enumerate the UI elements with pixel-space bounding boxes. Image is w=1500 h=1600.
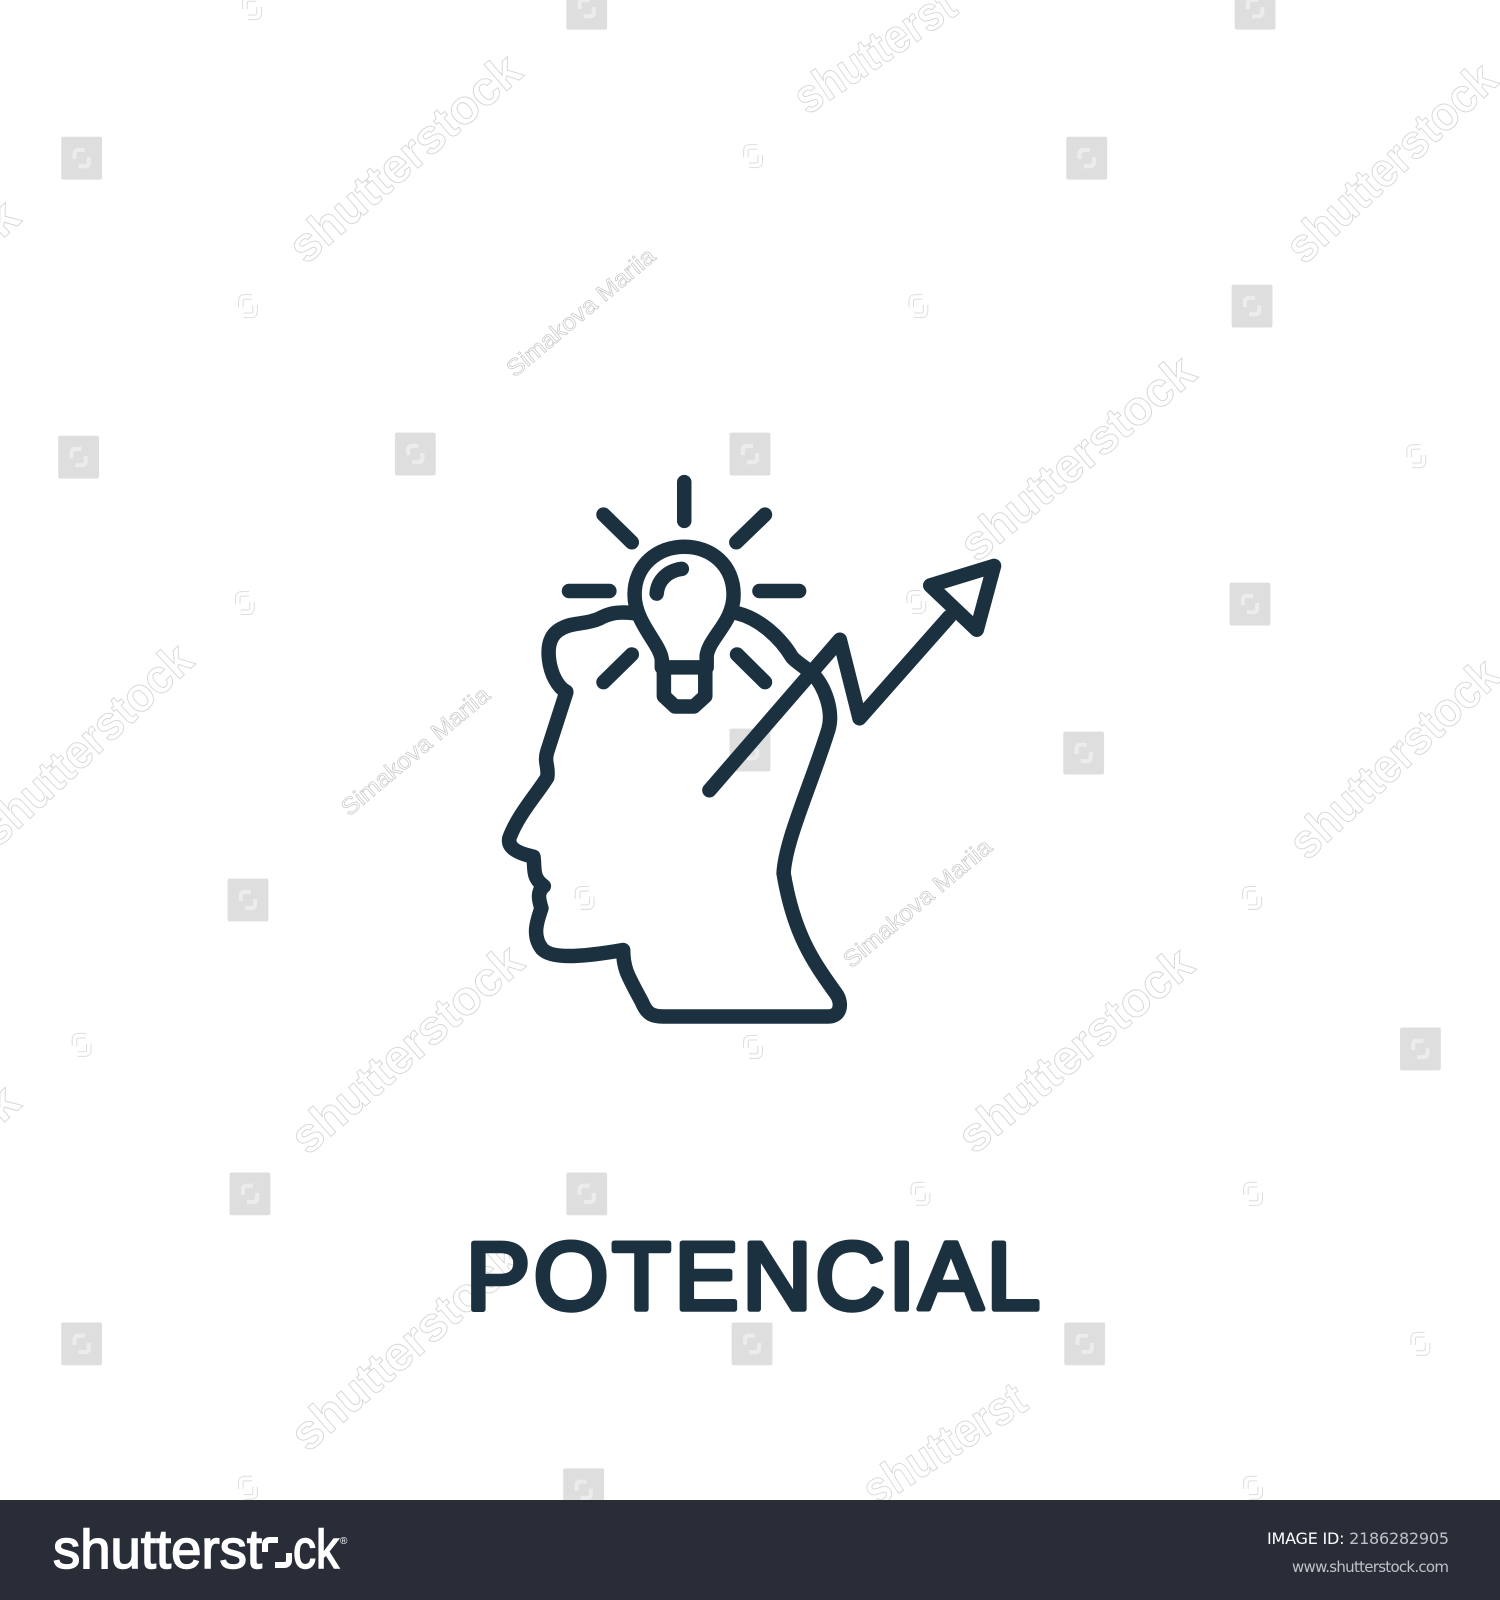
footer: shutterstock logo: ®	[340, 1536, 348, 1547]
title: POTENCIAL	[466, 1223, 1040, 1330]
watermark: shutterstock wordmarks: shutterstock	[280, 934, 534, 1165]
footer: shutterstock logo: ck	[293, 1518, 339, 1580]
watermark: shutterstock wordmarks: shutterstock	[950, 345, 1206, 572]
watermark: shutterstock wordmarks: shutterstock	[278, 43, 532, 274]
footer: shutterstock logo: shutterst	[53, 1518, 262, 1580]
watermark: shutterstock wordmarks: shutterst	[853, 1373, 1036, 1517]
watermark: author credit	[336, 242, 998, 973]
watermark: shutterstock wordmarks: shutterstock	[280, 1231, 534, 1462]
watermark: author credit: Simakova Mariia	[838, 833, 998, 973]
watermark: author credit: Simakova Mariia	[501, 242, 661, 382]
icon: bulb rays	[569, 482, 799, 682]
icon: light bulb	[635, 547, 734, 706]
footer: image id: IMAGE ID: 2186282905	[1267, 1529, 1449, 1548]
footer: website: www.shutterstock.com	[1292, 1558, 1449, 1576]
icon: head with light bulb and rising arrow	[509, 482, 994, 1016]
icon: head outline	[509, 612, 840, 1016]
footer band	[0, 1500, 1500, 1600]
icon: rising arrow	[709, 566, 994, 790]
watermark: author credit: Simakova Mariia	[336, 681, 496, 821]
watermark: shutterstock wordmarks: shutterstock	[948, 937, 1204, 1164]
